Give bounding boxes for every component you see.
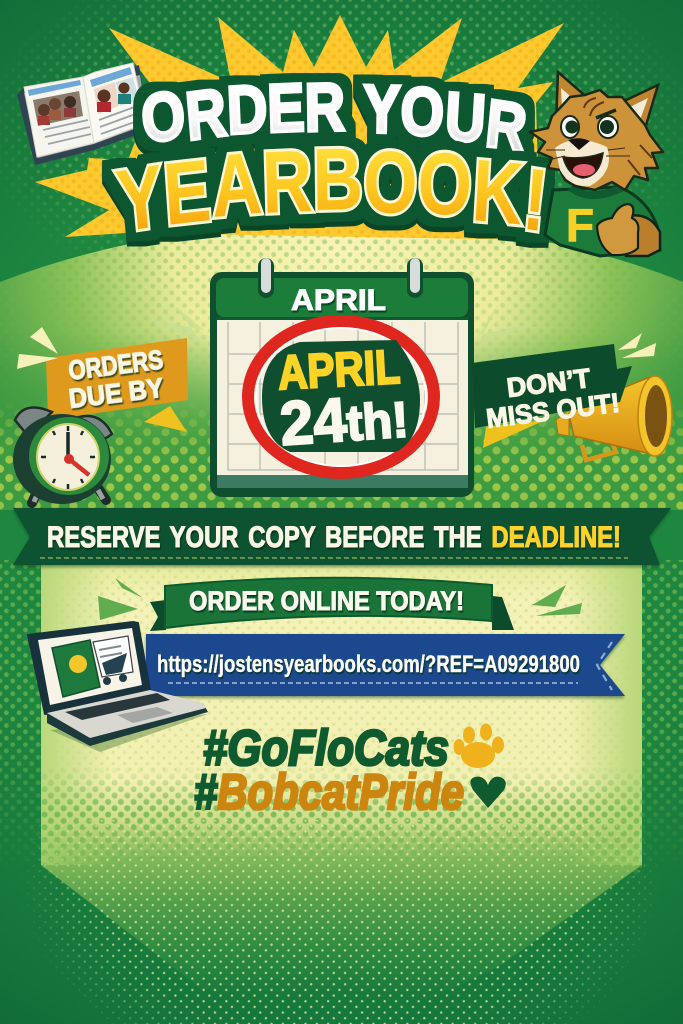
calendar grid bbox=[217, 320, 468, 475]
thumb hand bbox=[597, 204, 638, 255]
ears bbox=[556, 72, 590, 124]
date badge bbox=[262, 340, 420, 452]
icon: open yearbook bbox=[17, 63, 150, 165]
heading: Order Your: ORDER YOUR bbox=[138, 70, 530, 167]
eyes bbox=[561, 116, 579, 138]
arm bbox=[626, 215, 660, 256]
heading: Yearbook!: YEARBOOK! bbox=[112, 129, 552, 251]
month label: APRIL bbox=[291, 284, 386, 317]
hashtag: BobcatPride: #BobcatPride bbox=[194, 764, 464, 820]
banner text: DUE BY bbox=[67, 373, 165, 414]
calendar header bbox=[216, 278, 468, 317]
banner text: ORDERS bbox=[67, 344, 165, 386]
shirt letter F: F bbox=[566, 199, 594, 251]
banner: don't miss out bbox=[472, 333, 656, 448]
banner text: MISS OUT! bbox=[485, 388, 621, 434]
shirt bbox=[545, 187, 660, 256]
sunburst behind title bbox=[35, 15, 564, 240]
ribbon text: ORDER ONLINE TODAY! bbox=[189, 586, 464, 616]
calendar rings bbox=[258, 258, 423, 298]
banner text bbox=[481, 360, 621, 434]
banner: orders due by bbox=[17, 327, 188, 432]
icon: laptop bbox=[28, 622, 208, 752]
ribbon: order online today bbox=[98, 578, 582, 631]
calendar bbox=[210, 258, 474, 497]
icon: paw print bbox=[454, 724, 504, 768]
banner: reserve your copy bbox=[13, 508, 671, 565]
icon: alarm clock bbox=[13, 408, 112, 504]
banner text: DON’T bbox=[505, 363, 593, 403]
muzzle bbox=[555, 140, 609, 186]
date: April: APRIL bbox=[277, 341, 401, 400]
red circle bbox=[248, 321, 434, 473]
banner text bbox=[64, 344, 168, 414]
banner text: RESERVE YOUR COPY BEFORE THE DEADLINE! bbox=[47, 521, 621, 554]
mascot: bobcat with thumbs up bbox=[530, 72, 663, 256]
open mouth bbox=[563, 153, 603, 178]
icon: heart bbox=[470, 777, 506, 808]
icon: megaphone bbox=[556, 376, 672, 460]
head bbox=[530, 90, 663, 190]
hashtag: GoFloCats: #GoFloCats bbox=[203, 720, 449, 776]
date: 24th!: 24th! bbox=[278, 381, 410, 459]
url bar bbox=[146, 634, 625, 696]
